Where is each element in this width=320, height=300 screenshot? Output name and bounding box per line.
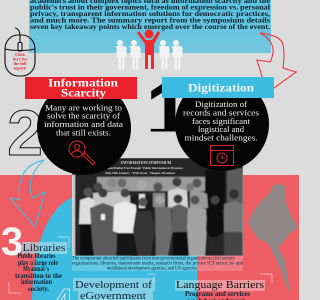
photo caption: organizations, libraries, mainstream media, research firms, the private ICT sector, bi- and xyxy=(72,262,244,266)
body text xyxy=(183,99,259,142)
body text: Programs and services xyxy=(185,291,250,298)
numeral 2: 2 xyxy=(7,97,43,169)
card: Digitization xyxy=(162,77,274,171)
body text: play a large role xyxy=(18,260,58,267)
body text: Many are working to xyxy=(45,102,122,112)
section: Development of eGovernment xyxy=(53,274,155,300)
photo xyxy=(72,158,243,257)
heading bar xyxy=(25,77,137,99)
numeral 3: 3 xyxy=(1,220,23,264)
panel: coloured lower background xyxy=(0,175,299,300)
heading: Language Barriers xyxy=(176,279,264,291)
icon: magnifier person xyxy=(69,141,95,165)
black circle xyxy=(175,77,269,171)
section: Language Barriers xyxy=(175,274,272,300)
panel: intro text: public's trust in their government, freedom of expression vs. personal xyxy=(30,2,270,12)
heading bar xyxy=(162,77,274,98)
body text: information xyxy=(21,279,52,286)
photo caption: multilateral development agencies, and UN agencies. xyxy=(107,266,198,272)
corner accent xyxy=(147,274,154,283)
body text xyxy=(44,102,123,138)
body text: Public libraries xyxy=(18,253,56,260)
numeral 1: 1 xyxy=(146,65,190,154)
photo banner text: 24th-25th January · 50th Street · Yangon, Myanmar xyxy=(105,171,175,175)
mouse caption: report! xyxy=(13,66,27,70)
body text: solve the scarcity of xyxy=(47,110,120,120)
heading highlight xyxy=(197,280,265,291)
heading: Development of xyxy=(75,279,152,291)
body text: Myanmar's xyxy=(23,266,49,273)
icon: computer mouse xyxy=(5,28,35,76)
heading: Libraries xyxy=(22,242,66,254)
panel: intro text: and much more. The summary report from the symposium details xyxy=(30,16,270,24)
mouse caption: the full xyxy=(13,61,27,66)
icon: group of people xyxy=(115,30,182,70)
mouse caption: Click xyxy=(15,52,25,57)
mouse caption xyxy=(13,52,27,70)
heading text: Digitization xyxy=(188,82,255,94)
map of Myanmar xyxy=(248,183,298,293)
heading highlight xyxy=(22,242,67,254)
body text: faces significant xyxy=(192,116,251,126)
panel: intro text: privacy, transparent information solutions for democratic practices, xyxy=(30,9,270,18)
body text: mindset challenges. xyxy=(184,132,258,142)
heading xyxy=(75,279,152,300)
photo caption xyxy=(72,255,244,272)
front row xyxy=(84,188,92,196)
mouse caption: here for xyxy=(13,56,27,62)
section: Libraries xyxy=(1,220,69,293)
heading text: Scarcity xyxy=(61,88,106,100)
panel: intro text xyxy=(29,0,271,53)
panel: intro text: seven key takeaway points which emerged over the course of the event. xyxy=(30,22,270,31)
arrow: red outline curved xyxy=(257,33,296,93)
heading highlight xyxy=(73,278,155,300)
heading text xyxy=(48,78,119,100)
photo banner text xyxy=(105,161,183,174)
body text: transition to the xyxy=(15,273,62,280)
corner accents xyxy=(9,237,69,293)
body text: Digitization of xyxy=(195,99,247,109)
body text xyxy=(15,253,62,293)
body text: that still exists. xyxy=(56,128,111,138)
body text: records and services xyxy=(183,108,259,118)
heading text: Information xyxy=(48,78,119,90)
body text: society. xyxy=(28,286,49,293)
body text: information and data xyxy=(44,119,123,129)
black circle xyxy=(37,81,131,175)
card: Information Scarcity xyxy=(25,77,137,175)
icon: browser clock xyxy=(210,146,234,166)
back row xyxy=(94,182,102,192)
photo caption: The symposium attracted participants from non-governmental organizations,civil society xyxy=(72,256,236,262)
corner accent xyxy=(260,274,272,283)
photo banner text: Journey to Overload-Finding Trust Enough "Public Information in Myanmar xyxy=(87,166,183,170)
arrow: blue outline xyxy=(10,160,45,227)
body text: logistical and xyxy=(198,124,245,134)
photo banner text: INFORMATION SYMPOSIUM xyxy=(121,160,171,165)
